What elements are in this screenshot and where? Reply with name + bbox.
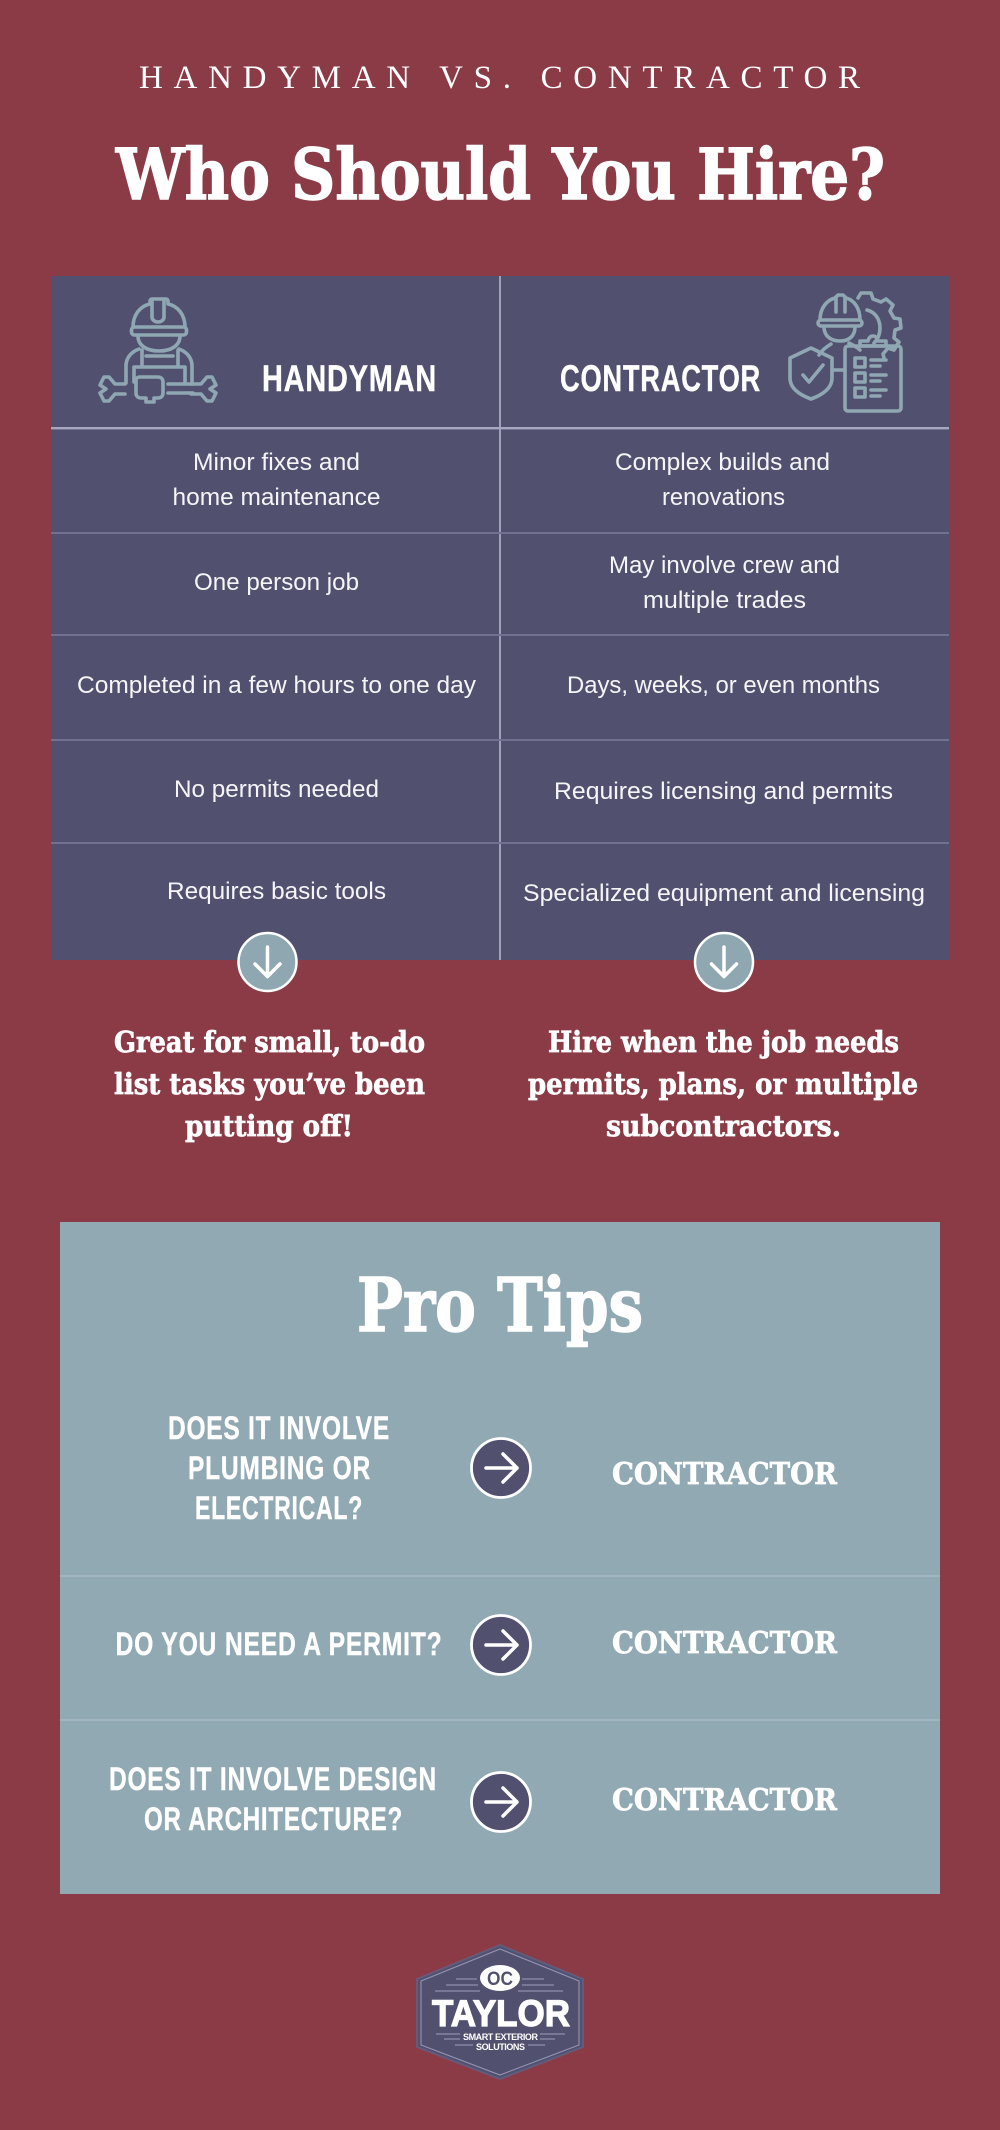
- tip 1 question: ELECTRICAL?: [195, 1490, 363, 1526]
- logo: OC Taylor: [417, 1945, 583, 2079]
- row 2 right: May involve crew and: [609, 552, 840, 579]
- tip 2 question: DO YOU NEED A PERMIT?: [116, 1626, 442, 1662]
- tip 1 answer: CONTRACTOR: [612, 1457, 838, 1492]
- callout: handyman: [114, 1025, 425, 1143]
- icon: tip 2 arrow: [472, 1616, 530, 1674]
- callout: contractor: subcontractors.: [606, 1109, 841, 1143]
- tip 3 question: DOES IT INVOLVE DESIGN: [109, 1761, 437, 1797]
- eyebrow heading: HANDYMAN VS. CONTRACTOR: [139, 60, 860, 96]
- callout: contractor: [528, 1025, 918, 1143]
- row 1 right: [615, 449, 830, 511]
- title: Who Should You Hire?: [115, 133, 885, 216]
- row 3 left: Completed in a few hours to one day: [77, 672, 476, 699]
- tip 1 question: DOES IT INVOLVE: [168, 1410, 390, 1446]
- logo: OC Taylor: SOLUTIONS: [476, 2042, 525, 2052]
- row 1 left: home maintenance: [172, 484, 380, 511]
- tip 1 question: PLUMBING OR: [188, 1450, 371, 1486]
- row 1 right: renovations: [662, 484, 785, 511]
- row 4 right: Requires licensing and permits: [554, 778, 893, 805]
- pro tips heading: Pro Tips: [357, 1263, 643, 1349]
- icon: down arrow right: [695, 933, 753, 991]
- tip 1 question: [168, 1410, 390, 1526]
- row 4 left: No permits needed: [174, 776, 379, 803]
- icon: handyman: [100, 299, 216, 402]
- row 5 right: Specialized equipment and licensing: [523, 880, 925, 907]
- column heading: contractor: CONTRACTOR: [560, 358, 761, 399]
- icon: contractor: [790, 293, 901, 411]
- row 2 right: multiple trades: [643, 587, 806, 614]
- tip 3 question: [109, 1761, 437, 1837]
- row 5 left: Requires basic tools: [167, 878, 386, 905]
- callout: handyman: list tasks you’ve been: [114, 1067, 425, 1101]
- row 3 right: Days, weeks, or even months: [567, 672, 880, 699]
- column heading: handyman: HANDYMAN: [262, 358, 437, 399]
- row 2 right: [609, 552, 840, 614]
- icon: down arrow left: [238, 933, 296, 991]
- logo: OC Taylor: OC: [487, 1969, 513, 1990]
- logo: OC Taylor: SMART EXTERIOR: [463, 2032, 538, 2042]
- callout: handyman: Great for small, to-do: [114, 1025, 425, 1059]
- tip 3 question: OR ARCHITECTURE?: [144, 1801, 403, 1837]
- row 1 left: Minor fixes and: [193, 449, 360, 476]
- tip 3 answer: CONTRACTOR: [612, 1783, 838, 1818]
- row 1 left: [172, 449, 380, 511]
- callout: contractor: Hire when the job needs: [548, 1025, 899, 1059]
- icon: tip 1 arrow: [472, 1438, 530, 1498]
- callout: contractor: permits, plans, or multiple: [528, 1067, 918, 1101]
- logo: OC Taylor: TAYLOR: [432, 1993, 570, 2034]
- tip 2 answer: CONTRACTOR: [612, 1626, 838, 1661]
- icon: tip 3 arrow: [472, 1772, 530, 1832]
- row 1 right: Complex builds and: [615, 449, 830, 476]
- callout: handyman: putting off!: [185, 1109, 353, 1143]
- row 2 left: One person job: [194, 569, 359, 596]
- panel: pro tips: [60, 1222, 940, 1894]
- panel: comparison table: [51, 276, 949, 960]
